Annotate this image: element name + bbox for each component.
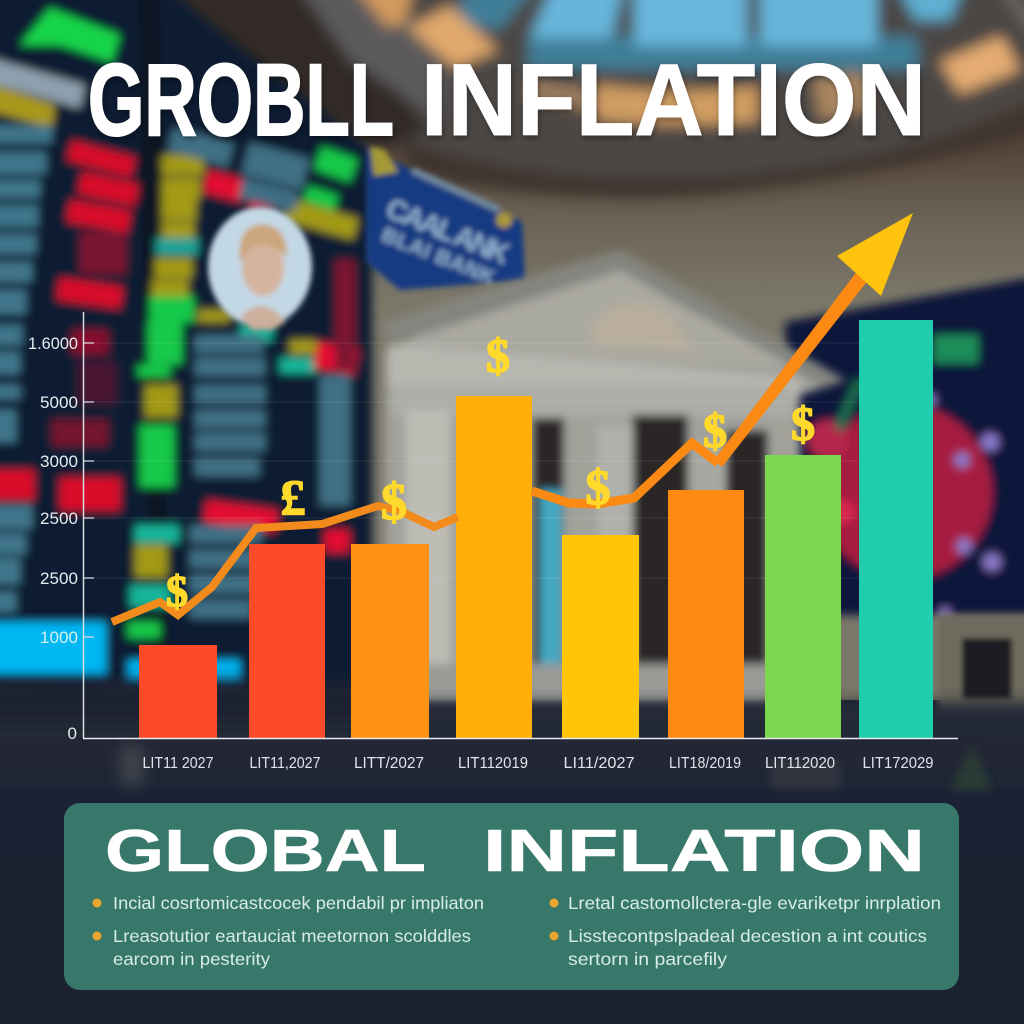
bullet points left: Lreasotutior eartauciat meetornon scolddles (113, 926, 471, 946)
chart: rising trend arrow (532, 213, 913, 504)
bullet points right: Lretal castomollctera-gle evariketpr inrplation (568, 893, 941, 913)
chart: x axis labels: LIT11 2027 (142, 755, 214, 772)
background: portrait on board (208, 207, 312, 330)
chart: bars (139, 320, 933, 738)
chart: currency symbols: $ (586, 459, 610, 515)
chart: currency symbols (166, 330, 815, 616)
panel heading: INFLATION (483, 818, 925, 884)
background: blue board (366, 146, 525, 290)
bullet points right: sertorn in parcefily (568, 949, 727, 969)
chart: baseline (83, 738, 958, 740)
chart: x axis labels (142, 755, 934, 772)
background: dome ceiling (150, 0, 1024, 198)
bullet points left (92, 893, 484, 969)
background: blue board: CAAL ANK (381, 193, 514, 271)
chart: y axis with labels: 5000 (40, 393, 78, 412)
background: bank building (381, 250, 846, 704)
chart: x axis labels: LIT11,2027 (250, 755, 321, 772)
title (88, 43, 926, 157)
background: blue board: BLAI BANK (378, 223, 498, 290)
panel heading (105, 818, 925, 884)
chart: currency symbols: $ (166, 567, 188, 616)
bullet points right (550, 893, 941, 969)
chart: currency symbols: £ (280, 469, 306, 525)
bullet points right: Lisstecontpslpadeal decestion a int coutics (568, 926, 927, 946)
chart: trend line part behind bar 4 (112, 506, 458, 622)
background: floor (0, 680, 1024, 1024)
background: lower wall and doorway (938, 615, 1024, 720)
bullet points left: earcom in pesterity (113, 949, 270, 969)
background: left ticker boards (0, 0, 372, 695)
chart: x axis labels: LIT18/2019 (669, 755, 741, 772)
title: INFLATION (421, 43, 926, 157)
chart: x axis labels: LIT172029 (862, 755, 934, 772)
chart: y axis with labels: 2500 (40, 569, 78, 588)
chart: currency symbols: $ (703, 405, 727, 458)
chart: x axis labels: LIT112020 (765, 755, 835, 772)
chart: currency symbols: $ (791, 398, 815, 451)
chart: currency symbols: $ (381, 474, 407, 531)
chart: x axis labels: LI11/2027 (564, 755, 635, 772)
chart: y axis with labels: 3000 (40, 452, 78, 471)
chart: currency symbols: $ (486, 330, 510, 383)
title: GROBLL (88, 43, 394, 157)
background: right screen (785, 268, 1024, 617)
chart: y axis with labels: 2500 (40, 509, 78, 528)
chart: x axis labels: LITT/2027 (354, 755, 424, 772)
chart: x axis labels: LIT112019 (458, 755, 528, 772)
chart: y axis with labels: 1000 (40, 628, 78, 647)
panel heading: GLOBAL (105, 818, 426, 884)
chart: y axis with labels (28, 312, 930, 743)
chart: y axis with labels: 1.6000 (28, 334, 78, 353)
chart: y axis with labels: 0 (68, 724, 77, 743)
panel: summary (64, 803, 959, 990)
bullet points left: Incial cosrtomicastcocek pendabil pr impliaton (113, 893, 484, 913)
